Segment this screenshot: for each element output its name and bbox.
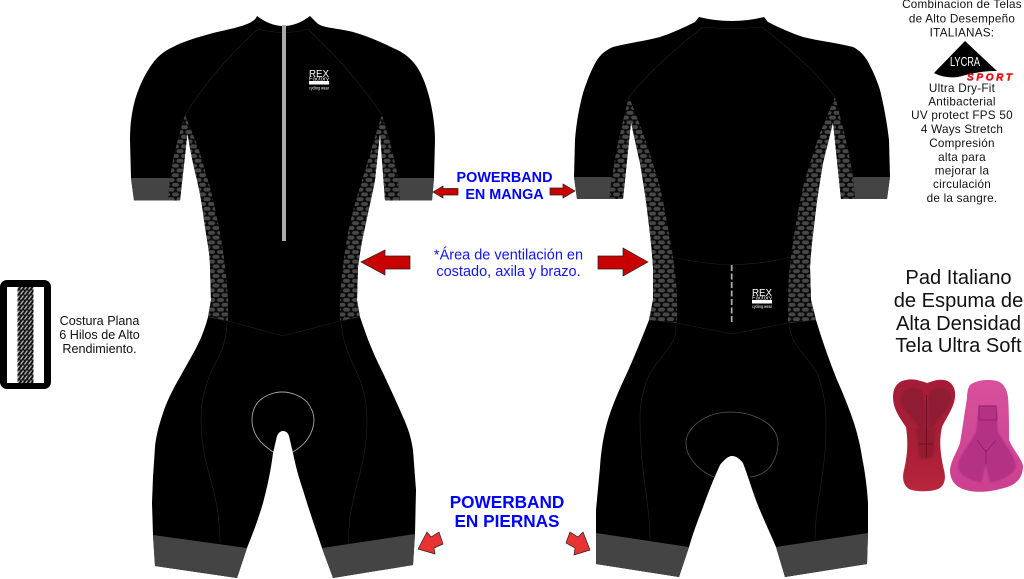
text: fabric features: de la sangre. (927, 192, 997, 205)
text: fabric features: Compresión (929, 137, 995, 150)
icon: pink pad (950, 380, 1023, 492)
back logo: Factory (752, 296, 773, 302)
front chamois seam (252, 392, 314, 452)
back seams (629, 27, 835, 540)
icon: red pad (893, 379, 955, 491)
arrow: sleeve right (550, 184, 575, 198)
back logo (752, 288, 773, 309)
front logo: Factory (309, 76, 330, 82)
text: fabric features: alta para (938, 151, 986, 164)
text: ventilation note: *Área de ventilación en (434, 248, 583, 264)
arrow: leg right (566, 532, 590, 555)
panel: fabric technology (902, 0, 1022, 205)
text: flat seam description: Rendimiento. (62, 342, 137, 356)
back ventilation mesh panels (609, 97, 855, 323)
text: pad heading: Alta Densidad (896, 313, 1021, 335)
front zipper (282, 25, 286, 241)
text: fabric heading: de Alto Desempeño (909, 12, 1015, 26)
back chamois seam (686, 412, 778, 477)
text: fabric features: UV protect FPS 50 (911, 109, 1013, 122)
back logo: cycling wear (752, 304, 772, 309)
back body silhouette (574, 17, 890, 577)
front logo: REX (309, 69, 329, 80)
text: pad heading: de Espuma de (894, 290, 1023, 312)
text: pad heading: Pad Italiano (905, 267, 1012, 289)
heading: powerband en manga: EN MANGA (465, 187, 544, 203)
arrow: ventilation left (361, 250, 410, 275)
text: fabric features: circulación (933, 178, 991, 191)
front ventilation mesh panels (168, 115, 400, 321)
text: flat seam description: Costura Plana (60, 314, 139, 328)
back logo: REX (752, 288, 772, 299)
back reflective dashed strip (731, 265, 733, 323)
panel: flat seam (0, 280, 140, 389)
heading: powerband en manga: POWERBAND (457, 170, 552, 186)
text: ventilation note: costado, axila y brazo. (436, 264, 581, 280)
arrow: ventilation right (598, 248, 648, 276)
front powerband cuffs (131, 178, 434, 578)
icon: lycra sport logo: LYCRA (950, 55, 980, 69)
panel: italian pad (893, 267, 1023, 492)
icon: flat seam swatch (0, 280, 51, 389)
text: flat seam description: 6 Hilos de Alto (59, 328, 140, 342)
arrow: sleeve left (433, 186, 458, 198)
text: fabric heading: ITALIANAS: (930, 26, 994, 40)
front seams (185, 29, 382, 545)
text: fabric features: Antibacterial (928, 96, 996, 108)
icon: lycra sport logo: SPORT (967, 72, 1013, 84)
back powerband cuffs (574, 177, 890, 577)
suit: front view (130, 16, 435, 578)
suit: back view (574, 17, 890, 577)
heading: powerband en piernas: EN PIERNAS (454, 511, 560, 531)
front logo (309, 69, 330, 90)
text: fabric features: Ultra Dry-Fit (929, 82, 995, 95)
front logo: cycling wear (309, 86, 329, 90)
arrow: leg left (418, 532, 443, 554)
front body silhouette (130, 16, 435, 578)
icon: lycra sport logo (934, 41, 1013, 84)
text: fabric features: 4 Ways Stretch (921, 123, 1003, 136)
text: fabric features: mejorar la (935, 164, 989, 178)
heading: powerband en piernas: POWERBAND (450, 492, 564, 512)
text: pad heading: Tela Ultra Soft (895, 335, 1022, 357)
